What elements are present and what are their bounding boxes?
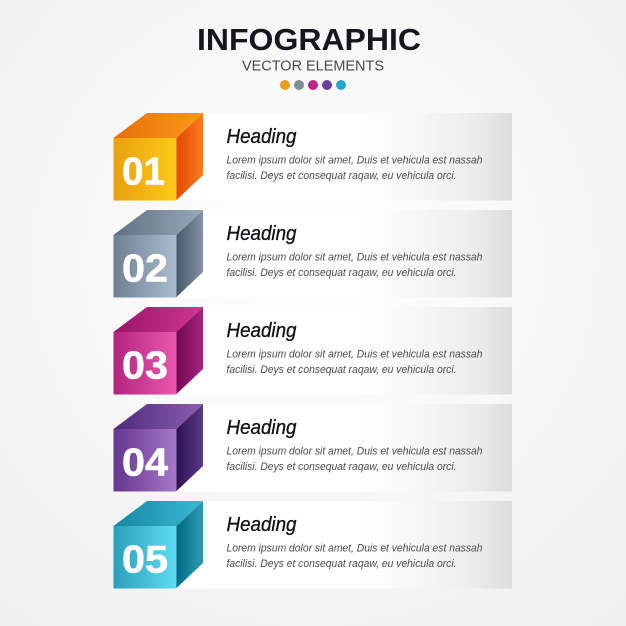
body text 4: facilisi. Deys et consequat raqaw, eu vehicula orci.	[226, 461, 456, 473]
panel 1	[176, 113, 512, 200]
cube 03: 03	[122, 344, 168, 388]
cube 04: 04	[122, 442, 168, 484]
heading 4: Heading	[226, 417, 296, 439]
panel 3	[176, 307, 512, 394]
cube 05: 05	[122, 538, 168, 582]
body text 4	[226, 446, 483, 473]
cube 04	[114, 404, 203, 492]
body text 2	[226, 252, 483, 279]
body text 1	[226, 154, 483, 182]
heading 2: Heading	[226, 223, 296, 245]
heading 5: Heading	[226, 514, 296, 536]
cube 02	[114, 210, 203, 298]
panel 5	[176, 501, 512, 588]
body text 2: facilisi. Deys et consequat raqaw, eu vehicula orci.	[226, 267, 456, 279]
cube 01	[114, 113, 203, 200]
row 1	[114, 113, 512, 200]
row 2	[114, 210, 512, 298]
row 3	[114, 307, 512, 394]
heading 1: Heading	[226, 126, 296, 148]
body text 3: Lorem ipsum dolor sit amet, Duis et vehicula est nassah	[226, 348, 483, 360]
body text 3	[226, 348, 483, 376]
body text 4: Lorem ipsum dolor sit amet, Duis et vehicula est nassah	[226, 446, 483, 458]
cube 05	[114, 501, 203, 588]
body text 5: facilisi. Deys et consequat raqaw, eu vehicula orci.	[226, 558, 456, 570]
body text 5: Lorem ipsum dolor sit amet, Duis et vehicula est nassah	[226, 542, 483, 554]
cube 01: 01	[122, 150, 165, 194]
colour dots	[280, 80, 346, 90]
row 4	[114, 404, 512, 492]
cube 02: 02	[122, 248, 168, 290]
row 5	[114, 501, 512, 588]
body text 2: Lorem ipsum dolor sit amet, Duis et vehicula est nassah	[226, 252, 483, 264]
body text 1: facilisi. Deys et consequat raqaw, eu vehicula orci.	[226, 170, 456, 182]
subtitle: VECTOR ELEMENTS	[242, 58, 384, 74]
cube 03	[114, 307, 203, 394]
body text 5	[226, 542, 483, 570]
body text 3: facilisi. Deys et consequat raqaw, eu vehicula orci.	[226, 364, 456, 376]
body text 1: Lorem ipsum dolor sit amet, Duis et vehicula est nassah	[226, 154, 483, 166]
heading 3: Heading	[226, 320, 296, 342]
panel 2	[176, 210, 512, 298]
panel 4	[176, 404, 512, 492]
title: INFOGRAPHIC	[197, 22, 421, 57]
